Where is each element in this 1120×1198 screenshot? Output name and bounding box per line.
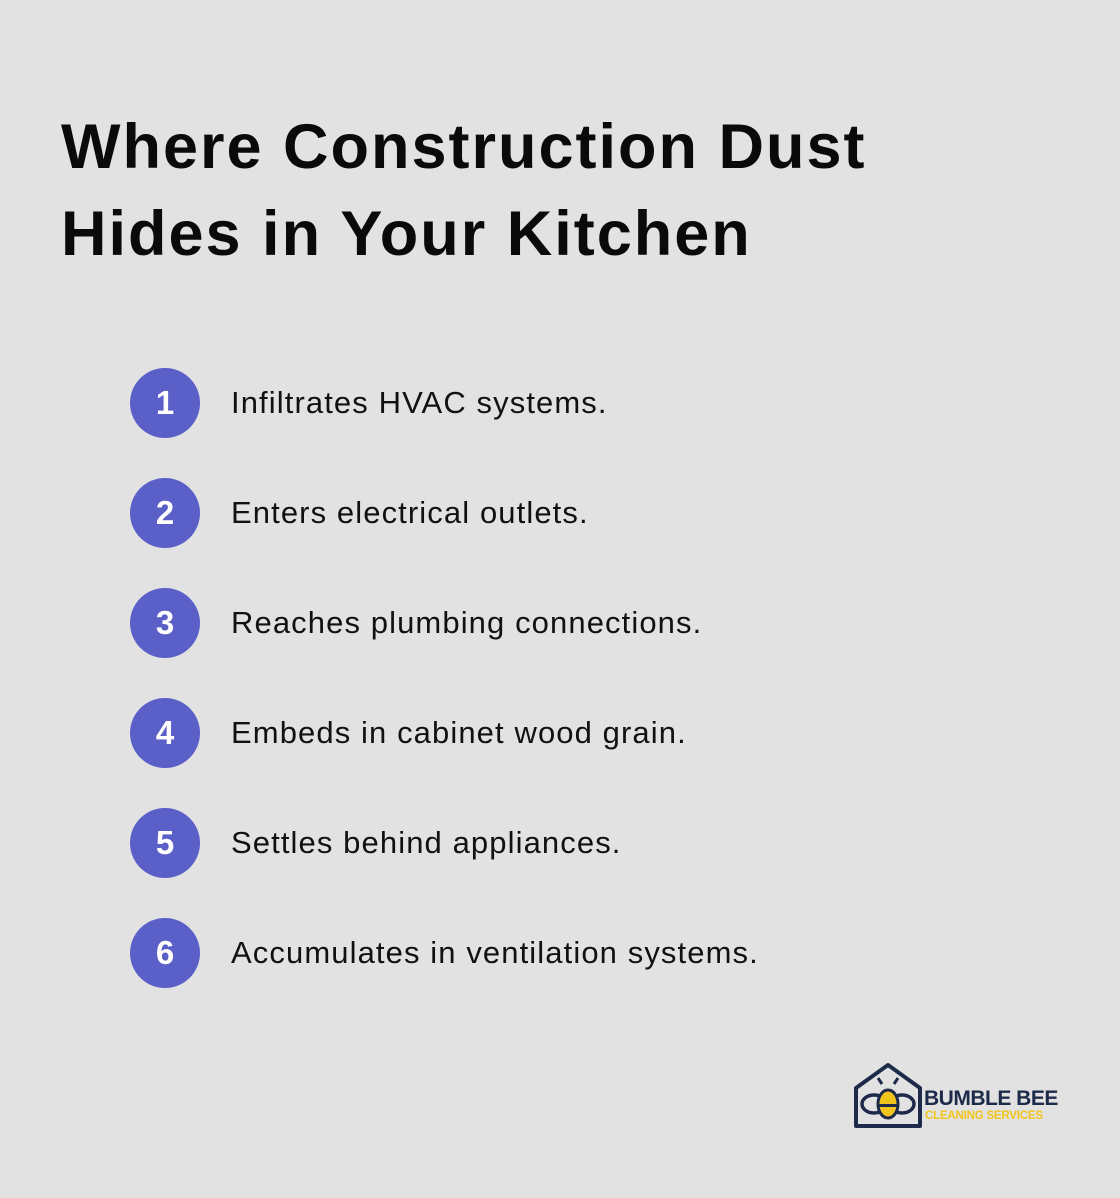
item 6: Accumulates in ventilation systems. xyxy=(231,935,759,970)
item 5 xyxy=(130,808,622,878)
item 3 xyxy=(130,588,702,658)
title: Where Construction Dust xyxy=(61,112,867,182)
item 1: Infiltrates HVAC systems. xyxy=(231,385,608,420)
item 3: 3 xyxy=(156,604,174,641)
item 4: 4 xyxy=(156,714,174,751)
icon: bee house xyxy=(854,1063,922,1128)
item 2 xyxy=(130,478,589,548)
item 5: 5 xyxy=(156,824,174,861)
item 4: Embeds in cabinet wood grain. xyxy=(231,715,687,750)
title xyxy=(61,112,867,269)
item 5: Settles behind appliances. xyxy=(231,825,622,860)
logo xyxy=(854,1063,1058,1128)
item 3: Reaches plumbing connections. xyxy=(231,605,702,640)
logo text: BUMBLE BEE xyxy=(924,1087,1058,1110)
logo: CLEANING SERVICES xyxy=(925,1110,1043,1122)
item 6 xyxy=(130,918,759,988)
item 2: Enters electrical outlets. xyxy=(231,495,589,530)
item 2: 2 xyxy=(156,494,174,531)
item 4 xyxy=(130,698,687,768)
item 1: 1 xyxy=(156,384,174,421)
title: Hides in Your Kitchen xyxy=(61,199,752,269)
item 1 xyxy=(130,368,608,438)
item 6: 6 xyxy=(156,934,174,971)
